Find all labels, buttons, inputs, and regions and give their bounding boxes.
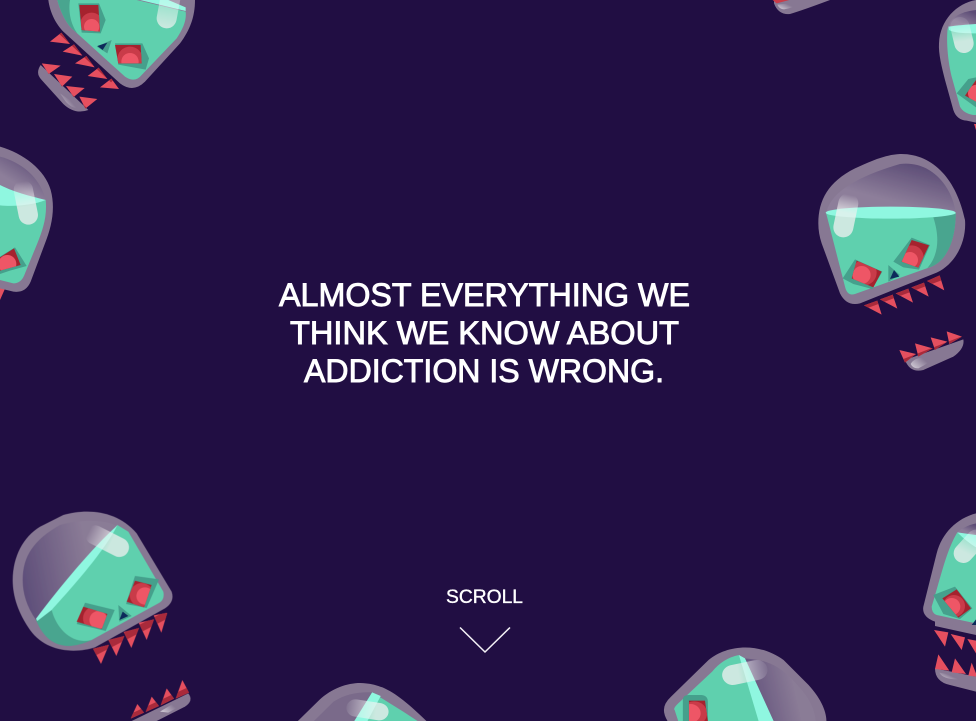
highlight — [167, 0, 171, 18]
headline: THINK WE KNOW ABOUT — [290, 315, 679, 351]
highlight — [23, 190, 28, 215]
eye — [0, 247, 27, 274]
highlight — [733, 670, 757, 675]
liquid — [932, 532, 976, 623]
skull: bottom right — [664, 647, 826, 721]
teeth — [934, 630, 976, 653]
scroll label: SCROLL — [446, 587, 523, 608]
headline: ADDICTION IS WRONG. — [304, 353, 664, 389]
skull: right bottom — [923, 513, 976, 692]
skull: top centre-right jaw fragment — [773, 0, 830, 14]
tooth — [0, 282, 7, 300]
helmet — [664, 647, 826, 721]
eyes and nose — [843, 238, 930, 289]
helmet — [0, 147, 53, 292]
glass surface — [354, 692, 381, 721]
liquid — [355, 692, 417, 721]
eyes and nose — [78, 3, 149, 72]
glass — [744, 658, 816, 721]
glass surface — [957, 532, 976, 547]
eye — [957, 77, 976, 130]
skull: bottom centre — [298, 683, 426, 721]
liquid — [947, 25, 976, 115]
liquid — [826, 213, 956, 295]
helmet — [923, 513, 976, 632]
headline: ALMOST EVERYTHING WE — [279, 277, 690, 313]
icon: scroll down chevron — [460, 628, 510, 652]
liquid — [57, 0, 186, 80]
helmet — [818, 154, 965, 304]
highlight — [963, 539, 976, 553]
glass surface — [140, 0, 186, 11]
eye and nose — [933, 587, 976, 625]
highlight — [95, 535, 119, 547]
glass surface — [0, 185, 46, 206]
liquid — [674, 655, 773, 721]
glass surface — [826, 207, 956, 219]
skull: top left — [37, 0, 195, 113]
headline — [279, 277, 690, 389]
skull: bottom left — [13, 512, 192, 721]
jaw with teeth — [897, 328, 965, 371]
highlight — [960, 27, 964, 43]
liquid — [36, 525, 164, 644]
skull: left — [0, 147, 53, 300]
jaw with teeth — [128, 678, 192, 721]
glass — [826, 164, 956, 215]
glass surface — [739, 655, 774, 721]
highlight — [843, 203, 848, 227]
eye — [681, 695, 708, 721]
eyes and nose — [77, 576, 159, 631]
jaw with teeth — [38, 64, 98, 112]
liquid — [0, 197, 46, 283]
glass surface — [948, 24, 976, 33]
skull: right — [818, 154, 965, 371]
glass — [23, 521, 117, 620]
teeth — [93, 612, 168, 664]
upper teeth — [50, 32, 119, 89]
jaw with teeth — [935, 654, 976, 692]
teeth — [864, 276, 944, 314]
helmet — [298, 683, 426, 721]
highlight — [356, 708, 379, 712]
skull: top right — [939, 0, 976, 130]
helmet — [13, 512, 172, 651]
helmet — [48, 0, 195, 88]
helmet — [939, 0, 976, 123]
glass surface — [36, 525, 117, 621]
